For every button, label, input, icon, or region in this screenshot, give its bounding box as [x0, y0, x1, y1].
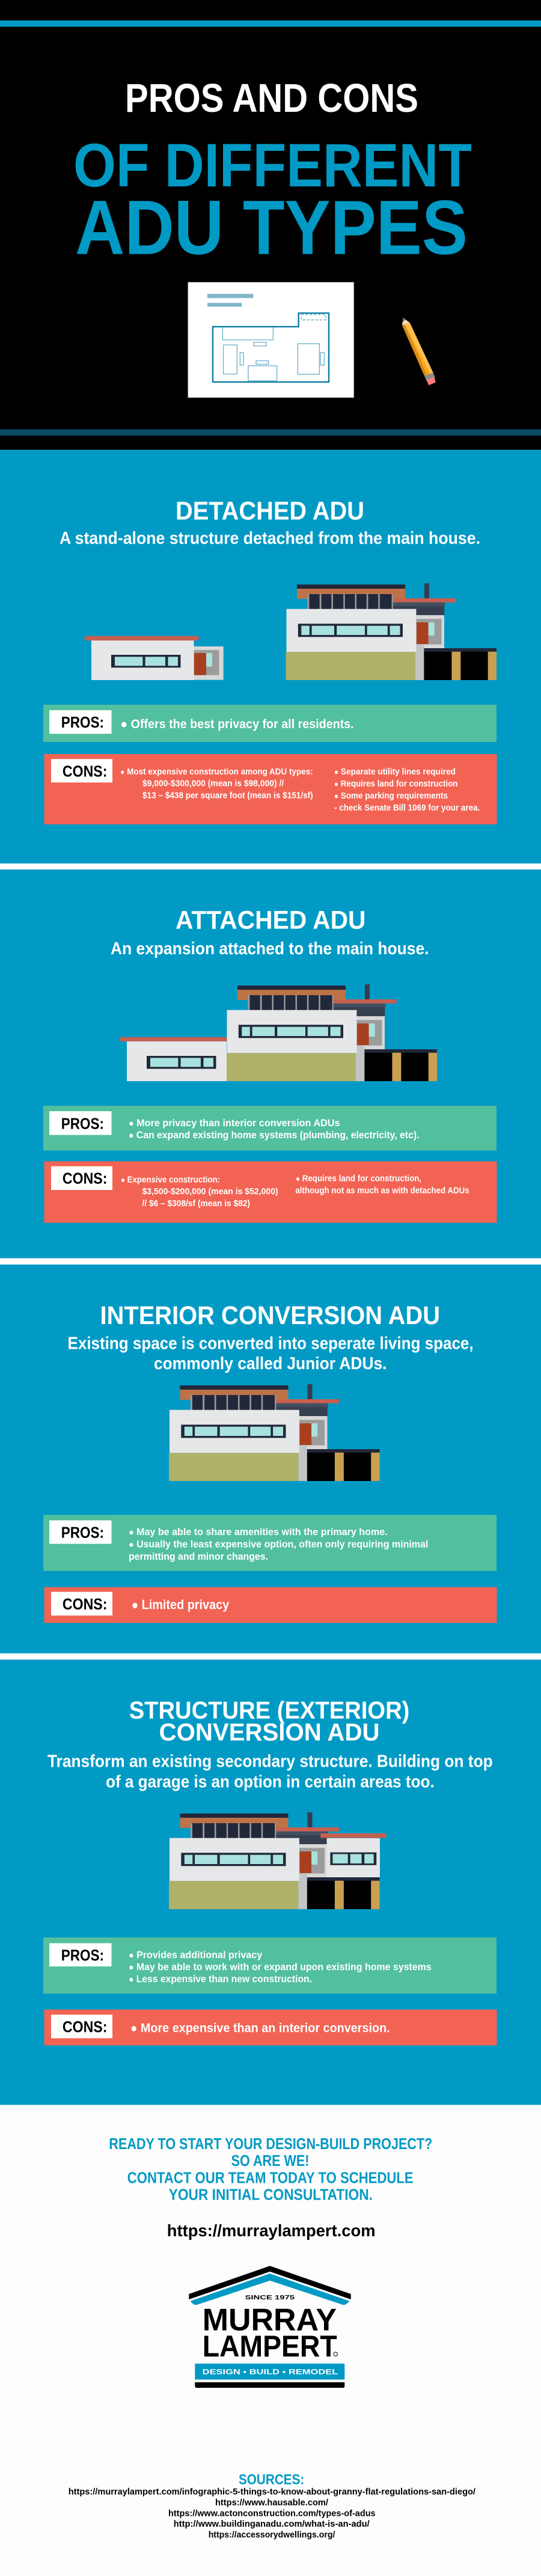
cons panel: [44, 1161, 497, 1223]
icon: pencil: [402, 317, 436, 385]
website url: https://murraylampert.com: [167, 2221, 376, 2240]
cons panel: ● More expensive than an interior conversion.: [130, 2021, 390, 2035]
cons panel: $13 – $438 per square foot (mean is $151/sf): [142, 791, 313, 801]
heading: structure exterior conversion ADU: STRUCTURE (EXTERIOR): [129, 1696, 409, 1724]
subheading: structure exterior conversion ADU: Transform an existing secondary structure. Building on top: [47, 1752, 493, 1771]
title line: of different: OF DIFFERENT: [73, 131, 472, 200]
panel: attached ADU: [43, 906, 497, 1223]
pros panel: PROS:: [61, 1115, 104, 1133]
cons panel: CONS:: [63, 2017, 107, 2035]
panel: detached ADU: [43, 497, 497, 824]
pros panel: permitting and minor changes.: [129, 1551, 268, 1562]
cons panel: CONS:: [63, 1170, 107, 1188]
icon: house with unit above garage: [169, 1812, 386, 1909]
cons panel: ● Some parking requirements: [334, 791, 448, 801]
pros panel: ● May be able to share amenities with the primary home.: [129, 1526, 388, 1538]
cons panel: although not as much as with detached ADUs: [295, 1186, 469, 1196]
cons panel: [44, 1587, 497, 1623]
call to action: YOUR INITIAL CONSULTATION.: [169, 2186, 373, 2203]
cons panel: // $6 – $308/sf (mean is $82): [142, 1198, 250, 1209]
title line: adu types: ADU TYPES: [75, 185, 468, 271]
pros panel: PROS:: [61, 1524, 104, 1542]
call to action: READY TO START YOUR DESIGN-BUILD PROJECT?: [109, 2136, 432, 2153]
logo: Murray Lampert: SINCE 1975: [245, 2294, 295, 2301]
cons panel: $3,500-$200,000 (mean is $52,000): [142, 1186, 278, 1197]
pros panel: ● Can expand existing home systems (plumbing, electricity, etc).: [129, 1129, 420, 1141]
pros panel: [43, 1106, 497, 1151]
pros panel: [43, 1515, 497, 1571]
sources: https://accessorydwellings.org/: [209, 2530, 335, 2540]
title line: pros and cons: PROS AND CONS: [125, 76, 418, 121]
subheading: interior conversion ADU: Existing space is converted into seperate living space,: [67, 1334, 474, 1353]
subheading: attached ADU: An expansion attached to the main house.: [111, 939, 429, 958]
logo: Murray Lampert: LAMPERT: [203, 2329, 337, 2363]
cons panel: ● Separate utility lines required: [334, 767, 456, 777]
heading: structure exterior conversion ADU: CONVERSION ADU: [159, 1719, 380, 1746]
heading: structure exterior conversion ADU: [129, 1696, 409, 1746]
heading: attached ADU: ATTACHED ADU: [176, 906, 365, 934]
panel: structure (exterior) conversion ADU: [43, 1696, 497, 2046]
cons panel: ● Expensive construction:: [121, 1174, 220, 1185]
subheading: detached ADU: A stand-alone structure detached from the main house.: [60, 529, 480, 548]
cons panel: ● Requires land for construction,: [296, 1174, 421, 1184]
pros panel: ● Provides additional privacy: [129, 1949, 263, 1961]
pros panel: ● Usually the least expensive option, often only requiring minimal: [129, 1538, 428, 1550]
cons panel: $9,000-$300,000 (mean is $98,000) //: [142, 779, 284, 789]
logo: Murray Lampert: MURRAY: [203, 2303, 337, 2338]
logo: Murray Lampert: DESIGN • BUILD • REMODEL: [203, 2367, 338, 2376]
panel: interior conversion ADU: [43, 1301, 497, 1623]
cons panel: ● Requires land for construction: [334, 779, 458, 789]
pros panel: ● Offers the best privacy for all residents.: [120, 717, 354, 731]
pros panel: PROS:: [61, 1946, 104, 1964]
cons panel: CONS:: [63, 762, 107, 780]
cons panel: ● Limited privacy: [132, 1597, 230, 1612]
sources: https://murraylampert.com/infographic-5-things-to-know-about-granny-flat-regulations-san-diego/: [69, 2487, 476, 2497]
panel: blue sections background: [0, 450, 541, 2105]
pros panel: PROS:: [61, 713, 104, 731]
heading: detached ADU: DETACHED ADU: [176, 497, 364, 526]
pros panel: [43, 705, 497, 742]
cons panel: ● Most expensive construction among ADU types:: [120, 767, 313, 777]
pros panel: [43, 1937, 497, 1994]
cons panel: - check Senate Bill 1069 for your area.: [334, 803, 480, 813]
call to action: SO ARE WE!: [231, 2153, 309, 2170]
icon: small detached unit: [85, 636, 224, 680]
cons panel: [44, 754, 497, 824]
pros panel: ● May be able to work with or expand upon existing home systems: [129, 1961, 432, 1972]
pros panel: ● Less expensive than new construction.: [129, 1973, 312, 1985]
subheading: structure exterior conversion ADU: of a garage is an option in certain areas too.: [106, 1773, 435, 1792]
sources: http://www.buildinganadu.com/what-is-an-adu/: [174, 2519, 370, 2529]
icon: main house: [286, 583, 497, 680]
subheading: interior conversion ADU: commonly called Junior ADUs.: [154, 1354, 387, 1373]
subheading: structure exterior conversion ADU: [47, 1752, 493, 1792]
icon: house with attached unit: [120, 984, 437, 1081]
icon: house: [169, 1384, 380, 1481]
cons panel: CONS:: [63, 1595, 107, 1613]
sources: https://www.hausable.com/: [215, 2498, 329, 2507]
cons panel: [44, 2010, 497, 2046]
icon: blueprint floor plan: [188, 282, 354, 397]
subheading: interior conversion ADU: [67, 1334, 474, 1373]
sources: [69, 2471, 476, 2540]
logo: Murray Lampert: [189, 2266, 351, 2388]
header panel: [0, 0, 541, 450]
sources: https://www.actonconstruction.com/types-of-adus: [168, 2509, 376, 2518]
heading: interior conversion ADU: INTERIOR CONVERSION ADU: [100, 1301, 440, 1330]
call to action: CONTACT OUR TEAM TODAY TO SCHEDULE: [127, 2170, 414, 2186]
call to action: [109, 2136, 432, 2203]
pros panel: ● More privacy than interior conversion ADUs: [129, 1117, 340, 1129]
sources: SOURCES:: [239, 2471, 304, 2488]
